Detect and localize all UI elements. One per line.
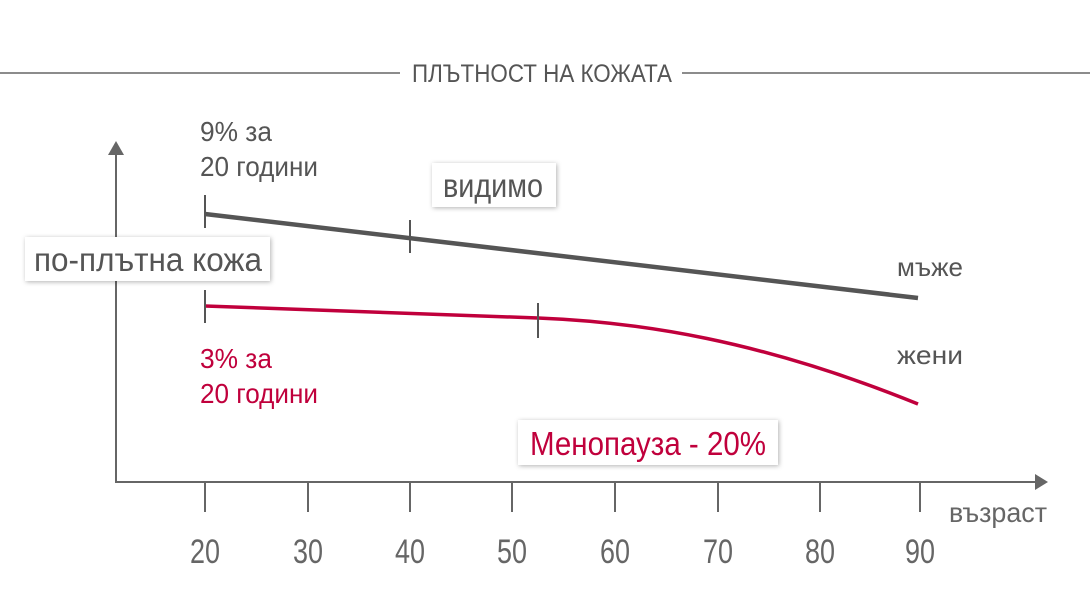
label: men 9%: 20 години [200, 151, 318, 182]
x axis labels: 70 [703, 533, 733, 571]
label: women 3%: 3% за [200, 343, 272, 374]
x axis labels: 40 [395, 533, 425, 571]
men line [205, 195, 918, 298]
x axis labels: 60 [600, 533, 630, 571]
label: women 3% [200, 343, 318, 409]
x axis labels: 50 [497, 533, 527, 571]
label: men 9% [200, 116, 318, 182]
x axis labels: 90 [905, 533, 935, 571]
label: men 9%: 9% за [200, 116, 272, 147]
x axis labels [190, 533, 935, 571]
y axis [108, 141, 124, 483]
x axis labels: 80 [805, 533, 835, 571]
callout: denser skin: по-плътна кожа [34, 241, 263, 278]
axis title: age: възраст [949, 497, 1047, 528]
women line [205, 290, 918, 404]
callout: menopause: Менопауза - 20% [530, 425, 766, 462]
x axis labels: 20 [190, 533, 220, 571]
x axis [115, 474, 1048, 512]
label: women: жени [897, 340, 963, 370]
label: women 3%: 20 години [200, 378, 318, 409]
callout: visible: видимо [443, 167, 543, 204]
title: ПЛЪТНОСТ НА КОЖАТА [412, 60, 672, 88]
x axis labels: 30 [293, 533, 323, 571]
label: men: мъже [897, 252, 963, 282]
